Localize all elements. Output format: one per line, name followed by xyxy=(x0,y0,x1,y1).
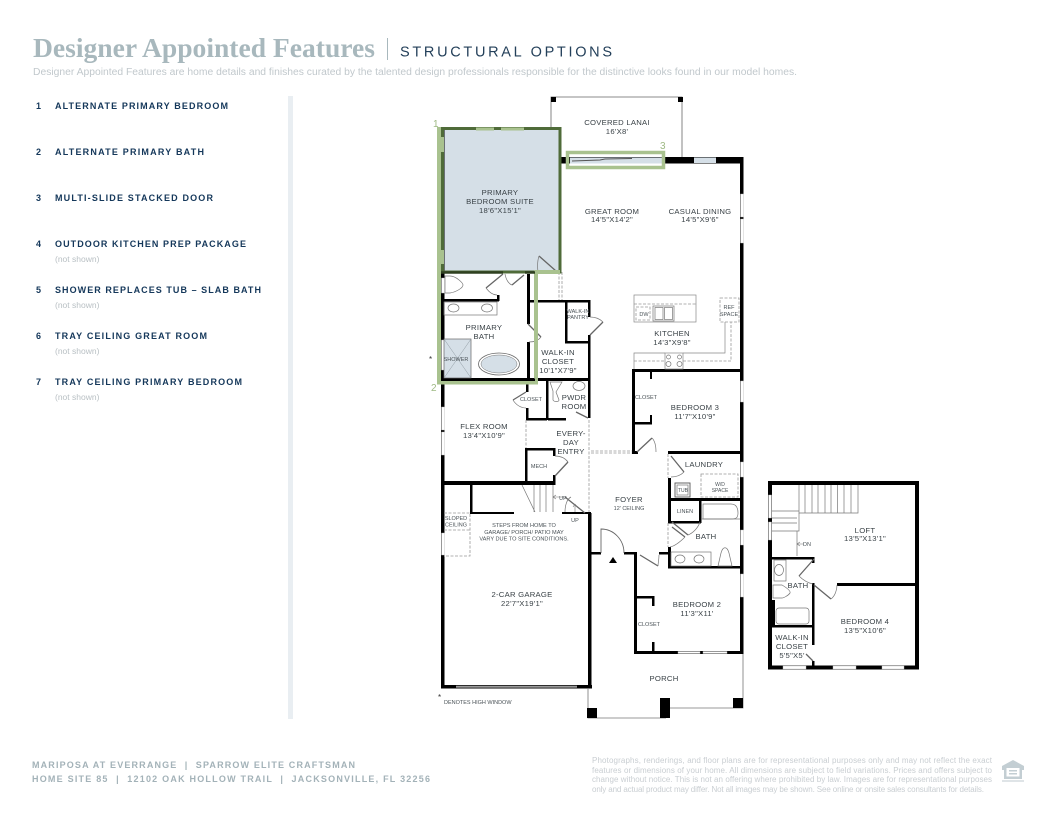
icon: equal housing xyxy=(1002,760,1024,782)
entry arrow xyxy=(609,557,617,563)
room labels: DAY xyxy=(563,438,579,447)
option 1 highlight: primary bedroom: 1 xyxy=(433,119,439,130)
high window note: * xyxy=(438,693,441,702)
first floor plan xyxy=(429,97,744,718)
room labels: CLOSET xyxy=(638,622,661,628)
room labels: 13'5"X13'1" xyxy=(844,534,886,543)
sidebar divider xyxy=(288,96,293,719)
room labels: DW xyxy=(639,312,649,318)
option 4: OUTDOOR KITCHEN PREP PACKAGE xyxy=(55,239,248,249)
room labels: 22'7"X19'1" xyxy=(501,599,543,608)
covered lanai xyxy=(551,97,683,158)
title: STRUCTURAL OPTIONS xyxy=(400,44,612,60)
room labels: ENTRY xyxy=(557,447,585,456)
porch xyxy=(587,654,743,718)
room labels: UP xyxy=(571,518,579,524)
room labels: 13'4"X10'9" xyxy=(463,431,505,440)
option 5: (not shown) xyxy=(55,300,100,310)
fixtures and doors xyxy=(773,542,837,661)
option 2 highlight: primary bath: 2 xyxy=(431,383,437,394)
title: Designer Appointed Features xyxy=(33,33,375,63)
room labels: MECH xyxy=(531,464,547,470)
room labels: 13'5"X10'6" xyxy=(844,626,886,635)
option 3 highlight: multi-slide door xyxy=(568,141,666,168)
room labels: BEDROOM 2 xyxy=(673,600,721,609)
high window note: DENOTES HIGH WINDOW xyxy=(444,700,512,706)
room labels: BATH xyxy=(474,332,494,341)
room labels: 2-CAR GARAGE xyxy=(491,590,553,599)
room labels: PRIMARY xyxy=(482,188,518,197)
option 6 xyxy=(36,331,209,356)
doors and fixtures xyxy=(444,256,740,566)
bath tub xyxy=(701,504,740,519)
room labels: CLOSET xyxy=(635,395,658,401)
high window note xyxy=(438,693,512,706)
powder room fixtures xyxy=(550,382,585,402)
room labels: WALK-IN xyxy=(541,348,575,357)
second floor plan xyxy=(768,483,918,669)
option 5 xyxy=(36,285,263,310)
shower xyxy=(444,339,471,378)
option list xyxy=(36,101,263,402)
exterior walls xyxy=(768,483,917,669)
room labels: W/D xyxy=(715,482,725,488)
room labels: CLOSET xyxy=(542,357,574,366)
footer address xyxy=(32,760,432,784)
option 6: 6 xyxy=(36,331,43,341)
option 3: 3 xyxy=(36,193,43,203)
room labels: STEPS FROM HOME TO xyxy=(492,523,557,529)
room labels: PORCH xyxy=(649,674,679,683)
option 7: 7 xyxy=(36,377,43,387)
disclaimer: only and actual product may differ. Not all images may be shown. See online or onsite sales consultants for details. xyxy=(592,785,984,794)
room labels: 18'6"X15'1" xyxy=(479,206,521,215)
option 3 highlight: multi-slide door: 3 xyxy=(660,141,666,152)
room labels: BATH xyxy=(788,581,808,590)
room labels: KITCHEN xyxy=(654,329,690,338)
room labels xyxy=(775,526,890,660)
dashed openings xyxy=(444,272,668,556)
option 6: TRAY CEILING GREAT ROOM xyxy=(55,331,209,341)
room labels: CASUAL DINING xyxy=(669,207,731,216)
room labels: BEDROOM 4 xyxy=(841,617,890,626)
room labels: SPACE xyxy=(720,312,738,318)
option 6: (not shown) xyxy=(55,346,100,356)
room labels: EVERY- xyxy=(556,429,586,438)
room labels: BEDROOM 3 xyxy=(671,403,719,412)
subtitle: Designer Appointed Features are home details and finishes curated by the talented design professionals responsible for the distinctive looks found in our model homes. xyxy=(33,67,797,78)
room labels: 14'5"X9'6" xyxy=(681,215,719,224)
option 7: TRAY CEILING PRIMARY BEDROOM xyxy=(55,377,244,387)
option 2: 2 xyxy=(36,147,43,157)
room labels: 11'7"X10'9" xyxy=(674,412,716,421)
covered lanai: COVERED LANAI xyxy=(584,118,650,127)
room labels: 14'3"X9'8" xyxy=(653,338,691,347)
WC and vanity xyxy=(444,276,497,315)
covered lanai: 16'X8' xyxy=(606,127,628,136)
stairs xyxy=(522,485,553,512)
room labels: GARAGE/ PORCH/ PATIO MAY xyxy=(484,530,564,536)
room labels: LAUNDRY xyxy=(685,460,723,469)
room labels: PRIMARY xyxy=(466,323,502,332)
room labels: UP xyxy=(559,496,567,502)
room labels: SHOWER xyxy=(444,357,468,363)
primary bedroom highlight fill xyxy=(443,130,559,273)
room labels: LOFT xyxy=(855,526,875,535)
room labels: FOYER xyxy=(615,495,643,504)
room labels: WALK-IN xyxy=(775,633,809,642)
room labels: FLEX ROOM xyxy=(460,422,508,431)
room labels: 14'5"X14'2" xyxy=(591,215,633,224)
bath vanity and wc xyxy=(671,548,732,566)
ref space xyxy=(720,298,739,322)
kitchen island xyxy=(634,295,696,322)
option 4: 4 xyxy=(36,239,43,249)
option 3: MULTI-SLIDE STACKED DOOR xyxy=(55,193,215,203)
disclaimer: features or dimensions of your home. All dimensions are subject to field variations. Prices and offers subject to xyxy=(592,766,993,775)
stairs xyxy=(772,485,858,556)
disclaimer xyxy=(592,756,993,794)
tub xyxy=(478,353,520,375)
option 1 highlight: primary bedroom xyxy=(433,119,560,272)
room labels: * xyxy=(429,355,432,364)
room labels: BEDROOM SUITE xyxy=(466,197,534,206)
room labels: CEILING xyxy=(445,522,467,528)
room labels: 11'3"X11' xyxy=(680,609,714,618)
room labels: GREAT ROOM xyxy=(585,207,639,216)
title xyxy=(33,33,612,63)
laundry fixtures xyxy=(675,474,738,497)
room labels: REF xyxy=(724,305,735,311)
footer address: MARIPOSA AT EVERRANGE | SPARROW ELITE CRAFTSMAN xyxy=(32,760,357,770)
option 5: SHOWER REPLACES TUB – SLAB BATH xyxy=(55,285,263,295)
option 1: 1 xyxy=(36,101,43,111)
room labels: TUB xyxy=(678,488,689,494)
room labels: CLOSET xyxy=(776,642,808,651)
interior walls xyxy=(770,557,918,667)
option 4 xyxy=(36,239,248,264)
windows xyxy=(442,194,744,654)
room labels: PANTRY xyxy=(567,315,589,321)
option 7: (not shown) xyxy=(55,392,100,402)
exterior walls xyxy=(441,127,744,688)
room labels: 5'5"X5' xyxy=(779,651,805,660)
room labels: 12' CEILING xyxy=(614,506,644,512)
room labels: LINEN xyxy=(677,509,693,515)
room labels: SLOPED xyxy=(445,516,467,522)
disclaimer: change without notice. This is not an offering where prohibited by law. Images are for representational purposes xyxy=(592,775,992,784)
room labels: 10'1"X7'9" xyxy=(539,366,577,375)
option 2: ALTERNATE PRIMARY BATH xyxy=(55,147,206,157)
option 5: 5 xyxy=(36,285,43,295)
option 7 xyxy=(36,377,244,402)
room labels: VARY DUE TO SITE CONDITIONS. xyxy=(479,536,569,542)
room labels: SPACE xyxy=(712,488,729,494)
option 4: (not shown) xyxy=(55,254,100,264)
room labels: DN xyxy=(803,542,811,548)
option 2 highlight: primary bath xyxy=(431,127,560,394)
up arrows xyxy=(553,495,577,512)
option 1: ALTERNATE PRIMARY BEDROOM xyxy=(55,101,230,111)
room labels: WALK-IN xyxy=(567,309,589,315)
room labels: CLOSET xyxy=(520,397,543,403)
kitchen counter xyxy=(634,322,731,369)
room labels xyxy=(429,188,738,683)
room labels: BATH xyxy=(696,532,716,541)
footer address: HOME SITE 85 | 12102 OAK HOLLOW TRAIL | JACKSONVILLE, FL 32256 xyxy=(32,774,432,784)
interior walls xyxy=(441,274,743,654)
disclaimer: Photographs, renderings, and floor plans are for representational purposes only and may not reflect the exact xyxy=(592,756,993,765)
room labels: PWDR xyxy=(562,393,586,402)
room labels: ROOM xyxy=(562,402,586,411)
